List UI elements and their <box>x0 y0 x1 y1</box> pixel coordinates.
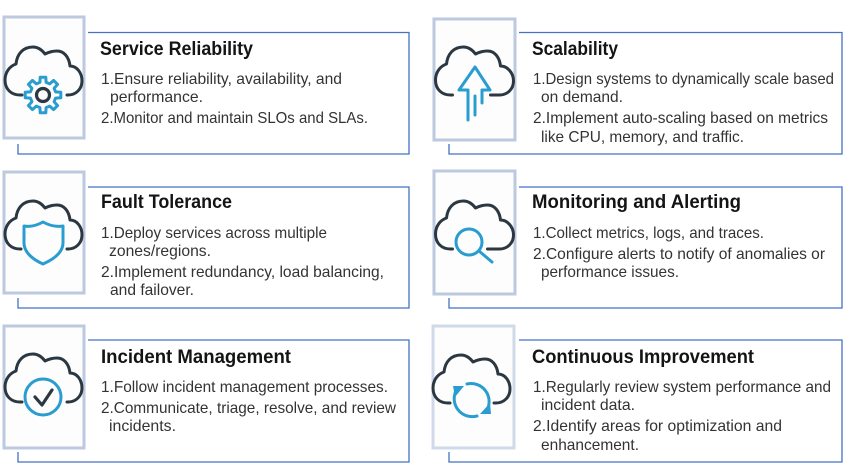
text block: incident data. <box>541 397 635 414</box>
panel: Scalability <box>434 19 842 154</box>
text block: zones/regions. <box>109 243 211 260</box>
text block <box>533 225 826 281</box>
panel: Service Reliability <box>4 17 409 154</box>
icon: cloud with upload arrow <box>434 19 515 140</box>
text block: 1.Deploy services across multiple <box>101 225 327 242</box>
heading: Scalability <box>532 39 618 60</box>
text block: on demand. <box>541 89 623 106</box>
icon: cloud with magnifier <box>434 171 515 294</box>
text block <box>101 379 396 435</box>
text block: 2.Implement auto-scaling based on metrics <box>533 110 828 127</box>
text block: 2.Implement redundancy, load balancing, <box>101 264 384 281</box>
text block <box>101 71 368 127</box>
heading: Monitoring and Alerting <box>532 192 741 213</box>
text block: 1.Follow incident management processes. <box>101 379 388 396</box>
text block: and failover. <box>110 282 194 299</box>
panel: Fault Tolerance <box>4 172 409 308</box>
text block: 2.Monitor and maintain SLOs and SLAs. <box>101 110 368 127</box>
icon: cloud with shield <box>4 172 84 293</box>
text block: 1.Regularly review system performance and <box>533 379 831 396</box>
text block: 1.Ensure reliability, availability, and <box>101 71 342 88</box>
text block: performance. <box>110 89 203 106</box>
text block <box>533 379 831 454</box>
panel: Continuous Improvement <box>433 326 842 462</box>
icon: cloud with refresh arrows <box>433 326 514 448</box>
heading: Incident Management <box>101 347 292 368</box>
card outline <box>449 32 842 154</box>
text block: 2.Configure alerts to notify of anomalies or <box>533 246 826 263</box>
text block: 2.Identify areas for optimization and <box>533 418 782 435</box>
heading: Fault Tolerance <box>101 192 232 213</box>
card outline <box>449 187 842 308</box>
panel: Monitoring and Alerting <box>434 171 842 308</box>
text block: 2.Communicate, triage, resolve, and review <box>101 400 396 417</box>
heading: Service Reliability <box>100 39 253 60</box>
card outline <box>449 340 842 462</box>
text block: incidents. <box>109 418 176 435</box>
card outline <box>18 187 409 308</box>
card outline <box>18 340 409 462</box>
panel: Incident Management <box>4 326 409 462</box>
text block <box>533 71 834 146</box>
text block: performance issues. <box>541 264 679 281</box>
icon: cloud with check mark <box>4 326 84 448</box>
icon: cloud with gear <box>4 17 84 138</box>
text block <box>101 225 384 299</box>
text block: enhancement. <box>541 437 639 454</box>
text block: like CPU, memory, and traffic. <box>541 129 744 146</box>
text block: 1.Design systems to dynamically scale based <box>533 71 834 88</box>
card outline <box>18 32 409 154</box>
heading: Continuous Improvement <box>532 347 755 368</box>
text block: 1.Collect metrics, logs, and traces. <box>533 225 764 242</box>
